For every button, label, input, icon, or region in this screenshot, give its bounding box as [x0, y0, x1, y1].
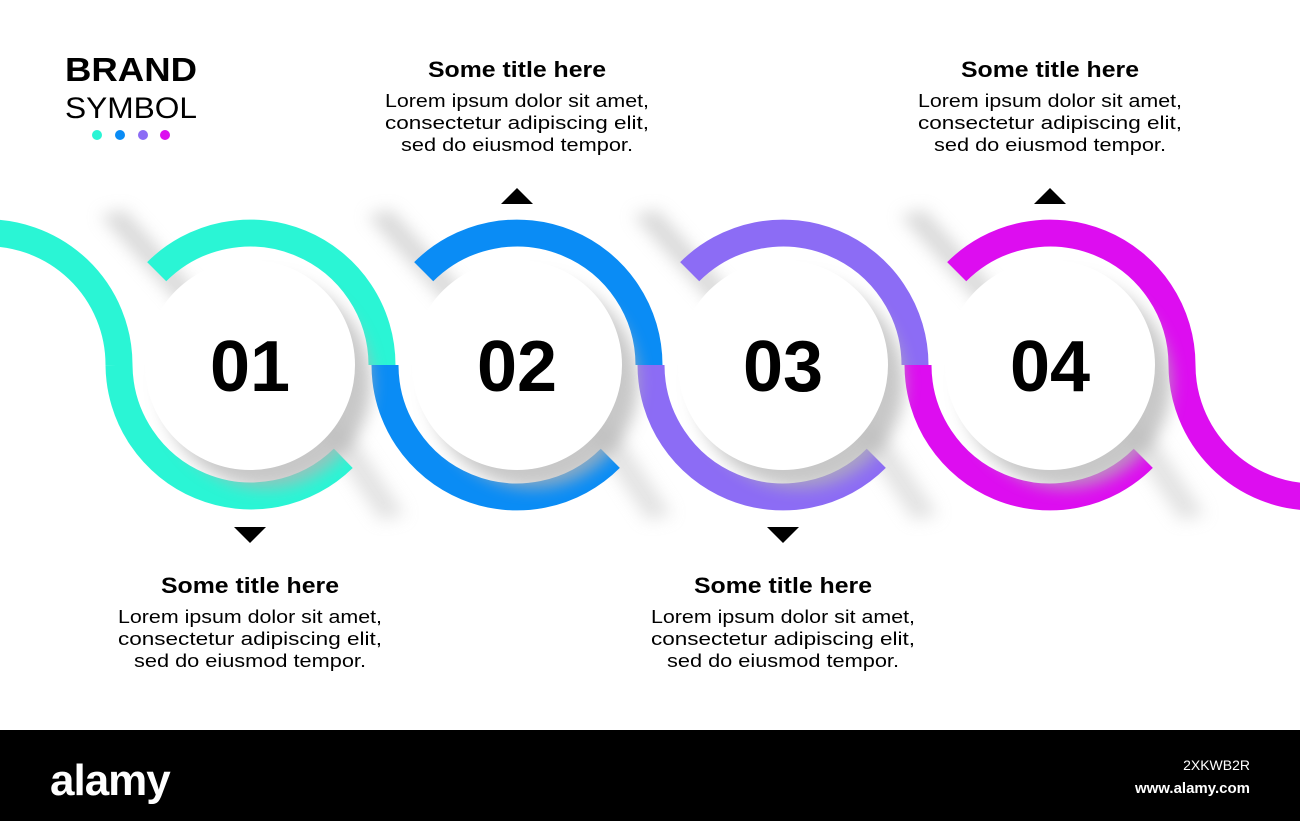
brand logo: BRAND	[65, 51, 197, 88]
text block 04: consectetur adipiscing elit,	[918, 113, 1182, 133]
text block 02	[385, 57, 649, 155]
circle 02: 02	[477, 327, 557, 407]
circle 04: 04	[1010, 327, 1090, 407]
circle 01: 01	[210, 327, 290, 407]
circle 04	[945, 260, 1155, 470]
brand logo: SYMBOL	[65, 92, 197, 125]
text block 03: Lorem ipsum dolor sit amet,	[651, 607, 915, 627]
text block 01: Some title here	[161, 573, 339, 598]
footer bar	[0, 730, 1300, 821]
text block 04: Some title here	[961, 57, 1139, 82]
arrow up 02	[501, 188, 533, 204]
arrow down 03	[767, 527, 799, 543]
text block 04: Lorem ipsum dolor sit amet,	[918, 91, 1182, 111]
text block 04: sed do eiusmod tempor.	[934, 135, 1166, 155]
text block 01	[118, 573, 382, 671]
text block 04	[918, 57, 1182, 155]
text block 02: consectetur adipiscing elit,	[385, 113, 649, 133]
text block 01: consectetur adipiscing elit,	[118, 629, 382, 649]
brand logo	[65, 51, 197, 140]
arrow down 01	[234, 527, 266, 543]
footer bar: www.alamy.com	[1134, 780, 1250, 797]
circle shadows	[161, 278, 1171, 488]
text block 01: Lorem ipsum dolor sit amet,	[118, 607, 382, 627]
circle 03	[678, 260, 888, 470]
text block 03: sed do eiusmod tempor.	[667, 651, 899, 671]
text block 01: sed do eiusmod tempor.	[134, 651, 366, 671]
text block 03	[651, 573, 915, 671]
footer bar: 2XKWB2R	[1183, 757, 1250, 773]
text block 03: consectetur adipiscing elit,	[651, 629, 915, 649]
wave path	[0, 233, 1300, 497]
circle 03: 03	[743, 327, 823, 407]
text block 02: Some title here	[428, 57, 606, 82]
text block 02: sed do eiusmod tempor.	[401, 135, 633, 155]
arrow up 04	[1034, 188, 1066, 204]
footer bar: alamy	[50, 756, 171, 805]
diagonal shadows	[100, 210, 1205, 520]
text block 03: Some title here	[694, 573, 872, 598]
text block 02: Lorem ipsum dolor sit amet,	[385, 91, 649, 111]
circle 01	[145, 260, 355, 470]
circle 02	[412, 260, 622, 470]
